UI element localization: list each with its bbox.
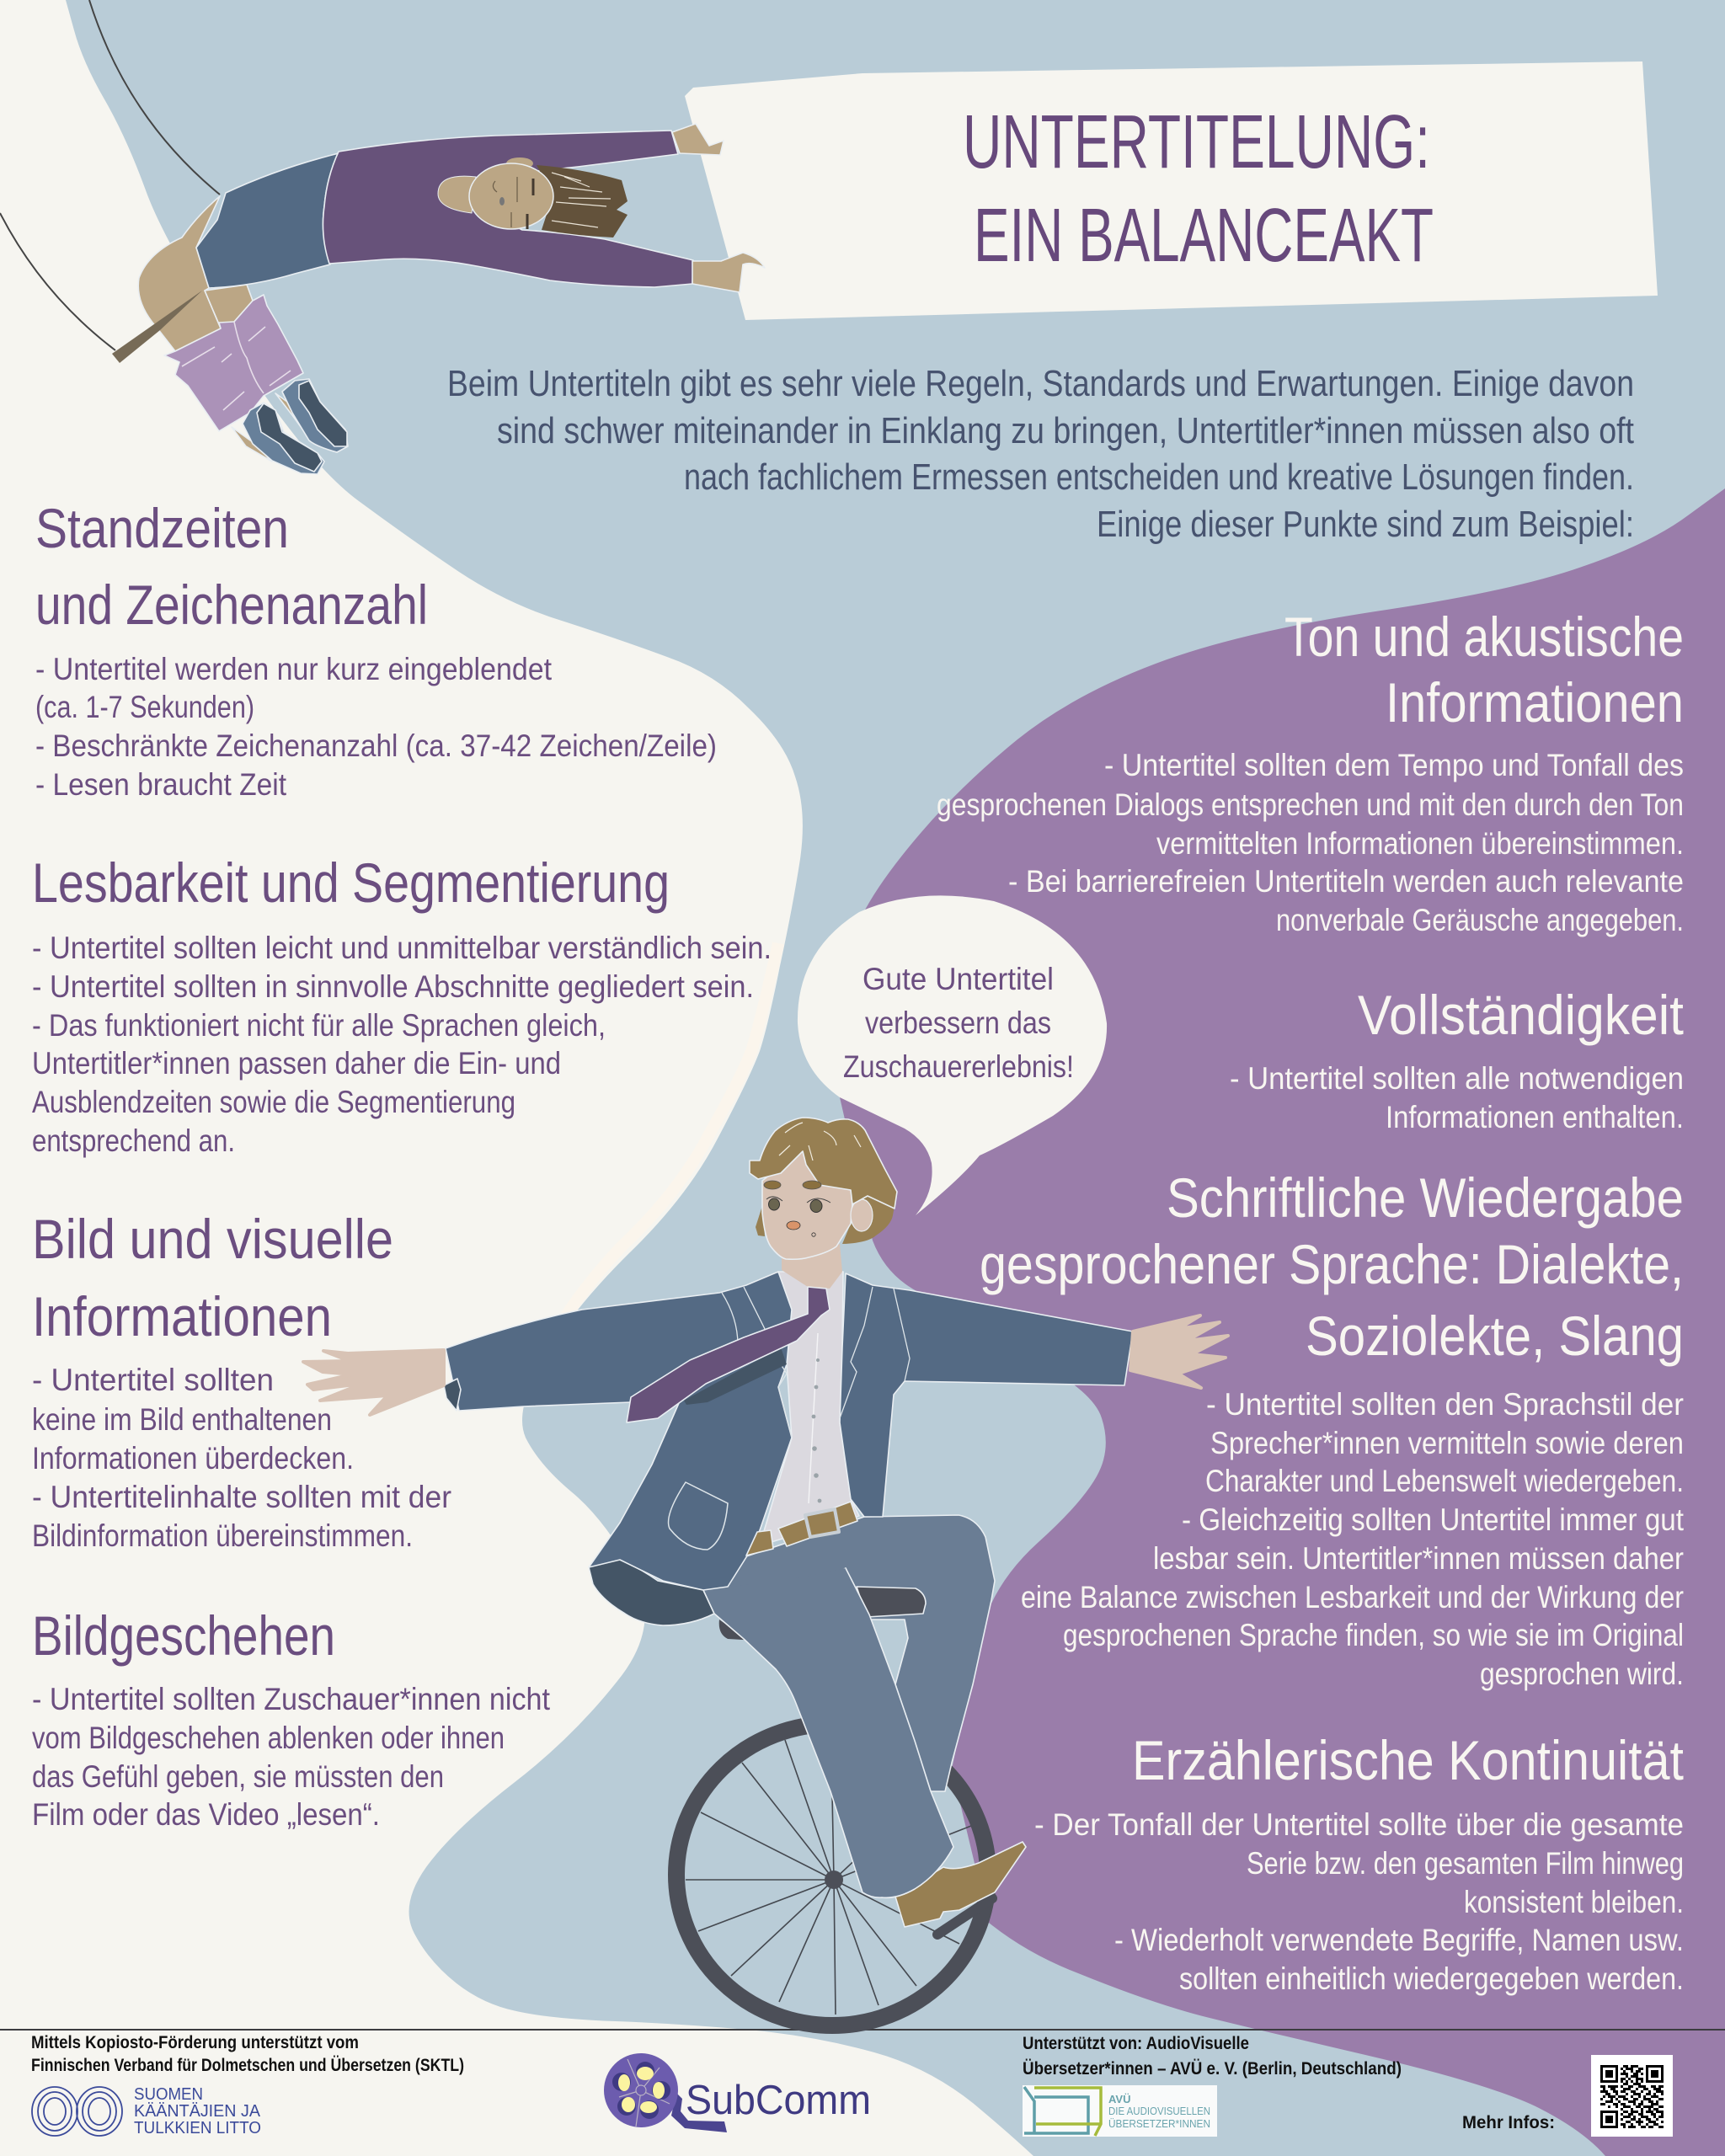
text: Schriftliche Wiedergabe: - Untertitel sollten den Sprachstil der: [1206, 1387, 1684, 1422]
tie shadow: [684, 1348, 787, 1405]
pedal: [937, 1898, 992, 1935]
belt: [746, 1502, 857, 1556]
logo: SKTL: SUOMEN: [134, 2085, 203, 2104]
heading: Bild: Bild und visuelle: [32, 1208, 393, 1270]
label: Mehr Infos: Mehr Infos:: [1462, 2113, 1555, 2132]
top with arms: [323, 131, 693, 287]
text: Vollständigkeit: - Untertitel sollten alle notwendigen: [1230, 1061, 1684, 1096]
text: Standzeiten: [35, 652, 717, 802]
panel: Lesbarkeit: [32, 851, 772, 1158]
text: Lesbarkeit: entsprechend an.: [32, 1123, 235, 1158]
neck: [782, 1244, 842, 1289]
bubble text: verbessern das: [865, 1006, 1051, 1040]
text: Erzählerische Kontinuität: - Der Tonfall der Untertitel sollte über die gesamte: [1034, 1807, 1684, 1842]
text: Lesbarkeit: - Untertitel sollten in sinnvolle Abschnitte gegliedert sein.: [32, 969, 754, 1004]
shorts: [196, 153, 339, 288]
heading: Standzeiten: und Zeichenanzahl: [35, 574, 428, 636]
wheel: [676, 1724, 988, 2025]
title: EIN BALANCEAKT: [974, 194, 1434, 278]
shirt placket and buttons: [809, 1333, 821, 1503]
socks: [164, 295, 303, 431]
panel: Standzeiten: [35, 497, 717, 802]
text: Lesbarkeit: - Das funktioniert nicht für alle Sprachen gleich,: [32, 1008, 606, 1043]
credit text: Mittels Kopiosto-Förderung unterstützt vom: [31, 2033, 359, 2052]
credit text: Übersetzer*innen – AVÜ e. V. (Berlin, Deutschland): [1023, 2059, 1402, 2079]
text: Bildgeschehen: - Untertitel sollten Zuschauer*innen nicht: [32, 1682, 551, 1716]
jacket underside: [589, 1560, 714, 1625]
logo: SKTL: [32, 2085, 261, 2137]
text: Vollständigkeit: [1230, 1061, 1684, 1134]
panel: Bild: [32, 1208, 451, 1553]
text: Schriftliche Wiedergabe: [1021, 1387, 1685, 1691]
pocket: [669, 1482, 728, 1550]
jacket right panel and sleeve: [840, 1273, 1133, 1517]
logo: SubComm: SubComm: [686, 2078, 871, 2123]
footer: AVÜ credit: [1023, 2034, 1402, 2137]
heading: Bildgeschehen: Bildgeschehen: [32, 1604, 335, 1667]
text: Erzählerische Kontinuität: konsistent bleiben.: [1464, 1885, 1684, 1919]
credit text: [31, 2033, 464, 2075]
logo: SubComm: [604, 2053, 871, 2132]
head: [438, 157, 553, 229]
panel: Erzählerische Kontinuität: [1034, 1729, 1684, 1996]
logo: SKTL: TULKKIEN LITTO: [134, 2119, 261, 2137]
text: Lesbarkeit: Untertitler*innen passen daher die Ein- und: [32, 1046, 561, 1081]
hip and back leg: [703, 1515, 995, 1791]
text: Erzählerische Kontinuität: [1034, 1807, 1684, 1996]
text: Bildgeschehen: das Gefühl geben, sie müssten den: [32, 1759, 444, 1794]
illustration: man on unicycle: [303, 1118, 1228, 2025]
footer: SKTL credit: [31, 2033, 464, 2137]
text: Bild: keine im Bild enthaltenen: [32, 1402, 332, 1437]
heading: Ton: [1284, 606, 1684, 734]
credit text: Unterstützt von: AudioVisuelle: [1023, 2034, 1249, 2053]
heading: Schriftliche Wiedergabe: Soziolekte, Slang: [1306, 1305, 1684, 1367]
heading: Standzeiten: Standzeiten: [35, 497, 289, 559]
heading: Schriftliche Wiedergabe: [980, 1166, 1684, 1367]
tie: [627, 1287, 830, 1422]
illustration: trapeze artist: [0, 0, 765, 474]
text: Lesbarkeit: [32, 931, 772, 1158]
hands: [672, 124, 765, 292]
text: Bild: - Untertitel sollten: [32, 1363, 274, 1397]
logo: AVÜ: DIE AUDIOVISUELLEN: [1108, 2105, 1210, 2117]
hair strands: [552, 173, 611, 227]
heading: Bild: [32, 1208, 393, 1348]
speech bubble: [798, 895, 1107, 1215]
seat: [857, 1587, 926, 1617]
text: Bildgeschehen: vom Bildgeschehen ablenken oder ihnen: [32, 1721, 505, 1755]
background: purple right area: [840, 488, 1725, 2156]
heading: Ton: Informationen: [1386, 671, 1684, 734]
text: Schriftliche Wiedergabe: gesprochen wird.: [1480, 1657, 1684, 1691]
intro text: [447, 363, 1634, 545]
front leg: [703, 1568, 953, 1897]
panel: Schriftliche Wiedergabe: [980, 1166, 1685, 1691]
hands: [303, 1315, 1228, 1415]
text: Bild: - Untertitelinhalte sollten mit der: [32, 1480, 451, 1514]
bubble text: Zuschauererlebnis!: [843, 1049, 1074, 1084]
head: [750, 1118, 897, 1259]
footer divider: [0, 2029, 1725, 2031]
back seat part: [719, 1620, 757, 1641]
text: Bild: [32, 1363, 451, 1553]
panel: Ton: [937, 606, 1684, 937]
text: Standzeiten: - Beschränkte Zeichenanzahl (ca. 37-42 Zeichen/Zeile): [35, 728, 717, 763]
panel: Vollständigkeit: [1230, 984, 1684, 1134]
text: Standzeiten: - Lesen braucht Zeit: [35, 767, 287, 802]
text: Ton: - Bei barrierefreien Untertiteln werden auch relevante: [1008, 864, 1684, 899]
jacket cuff: [444, 1379, 461, 1411]
bubble text: [843, 962, 1074, 1084]
shirt: [760, 1272, 859, 1545]
trapeze ropes: [0, 0, 220, 350]
text: Standzeiten: (ca. 1-7 Sekunden): [35, 690, 254, 724]
bubble text: Gute Untertitel: [862, 962, 1054, 996]
text: Vollständigkeit: Informationen enthalten.: [1386, 1100, 1684, 1134]
jacket left panel and sleeve: [446, 1272, 792, 1590]
logo: AVÜ: ÜBERSETZER*INNEN: [1108, 2117, 1210, 2130]
text: Bildgeschehen: [32, 1682, 551, 1832]
title banner: [685, 61, 1658, 320]
left jacket details: [722, 1287, 792, 1438]
heading: Standzeiten: [35, 497, 428, 636]
logo: AVÜ: [1023, 2085, 1217, 2137]
background: cream left area: [0, 0, 1033, 2156]
text: Bild: Informationen überdecken.: [32, 1441, 354, 1476]
credit text: [1023, 2034, 1402, 2079]
heading: Bild: Informationen: [32, 1285, 332, 1348]
QR code: [1591, 2055, 1673, 2137]
text: Standzeiten: - Untertitel werden nur kurz eingeblendet: [35, 652, 553, 686]
title: [963, 100, 1434, 278]
trapeze bar: [112, 291, 202, 363]
text: Schriftliche Wiedergabe: - Gleichzeitig sollten Untertitel immer gut: [1182, 1502, 1685, 1537]
shoe: [895, 1842, 1026, 1927]
text: Ton: [937, 748, 1684, 937]
text: Lesbarkeit: - Untertitel sollten leicht und unmittelbar verständlich sein.: [32, 931, 772, 965]
shoes: [243, 379, 348, 474]
legs: [138, 196, 306, 462]
text: Ton: - Untertitel sollten dem Tempo und Tonfall des: [1104, 748, 1684, 782]
title: UNTERTITELUNG:: [963, 100, 1430, 184]
text: Bild: Bildinformation übereinstimmen.: [32, 1518, 413, 1553]
text: Lesbarkeit: Ausblendzeiten sowie die Segmentierung: [32, 1085, 515, 1119]
background: warm edge strip: [566, 943, 778, 1315]
heading: Lesbarkeit: Lesbarkeit und Segmentierung: [32, 851, 670, 914]
right jacket details: [840, 1287, 910, 1418]
logo: AVÜ: AVÜ: [1108, 2093, 1130, 2105]
heading: Vollständigkeit: Vollständigkeit: [1358, 984, 1684, 1046]
panel: Bildgeschehen: [32, 1604, 551, 1832]
text: Bildgeschehen: Film oder das Video „lesen“.: [32, 1797, 380, 1832]
logo: SKTL: KÄÄNTÄJIEN JA: [134, 2102, 261, 2121]
credit text: Finnischen Verband für Dolmetschen und Übersetzen (SKTL): [31, 2056, 464, 2075]
hair: [537, 165, 628, 237]
